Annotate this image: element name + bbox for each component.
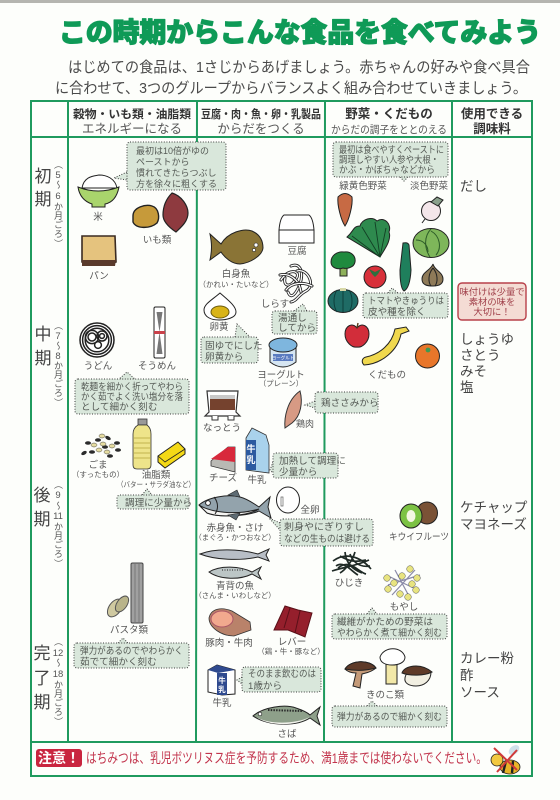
callout: cheese and milk: 少量から — [279, 466, 317, 478]
icon: kiwi — [389, 502, 449, 543]
icon: hijiki: ひじき — [335, 578, 363, 589]
period: middle: （ — [53, 321, 63, 331]
seasonings: completion period: カレー粉 — [460, 651, 514, 666]
icon: tofu — [279, 215, 314, 257]
table grid — [31, 101, 532, 742]
icon: bread — [82, 236, 116, 282]
icon: pasta — [104, 563, 148, 636]
period: completion — [34, 637, 63, 726]
header: seasonings: 使用できる — [461, 106, 523, 121]
label: fats and oils — [117, 469, 195, 489]
icon: tuna: （まぐろ・かつおなど） — [194, 533, 276, 542]
callout: drinking milk — [237, 667, 321, 692]
callout: pasta: 弾力があるのでやわらかく — [80, 645, 183, 657]
period: middle: ～ — [53, 341, 63, 350]
seasoning: dashi: だし — [460, 179, 487, 194]
callout: first vegetables — [333, 142, 448, 181]
callout: first vegetables: 調理しやすい人参や大根・ — [339, 154, 439, 166]
icon: sesame: （すったもの） — [72, 470, 124, 479]
header: vegetables: からだの調子をととのえる — [331, 124, 447, 136]
icon: pasta: パスタ類 — [110, 624, 148, 636]
header: protein: 豆腐・肉・魚・卵・乳製品 — [201, 107, 321, 121]
icon: cabbage — [413, 228, 449, 258]
callout: fibrous vegetables — [332, 608, 447, 639]
icon: somen: そうめん — [138, 361, 176, 372]
icon: milk carton: 乳 — [246, 454, 256, 465]
period: late: ） — [53, 559, 63, 568]
callout: udon and somen: として細かく刻む — [81, 401, 157, 413]
callout: drinking milk: 1歳から — [248, 680, 282, 692]
icon: pork and beef: 豚肉・牛肉 — [205, 637, 253, 649]
label: fruits: くだもの — [368, 370, 406, 381]
callout: fibrous vegetables: やわらかく煮て細かく刻む — [337, 627, 442, 639]
callout: raw fish warning: 刺身やにぎりすし — [284, 521, 364, 533]
icon: rice bowl — [78, 175, 119, 223]
icon: chicken breast — [285, 391, 314, 429]
icon: bee crossed out — [491, 743, 521, 774]
icon: carrot — [338, 194, 352, 226]
icon: onion — [422, 264, 443, 286]
period: middle: 中 — [34, 325, 52, 344]
callout: rice porridge — [114, 142, 226, 190]
callout: rice porridge: 慣れてきたらつぶし — [136, 167, 216, 178]
icon: liver — [257, 606, 325, 656]
icon: milk carton: 牛 — [246, 443, 256, 454]
icon: tofu: 豆腐 — [287, 245, 307, 257]
period: middle: 期 — [34, 349, 52, 368]
icon: mackerel: さば — [277, 729, 297, 740]
icon: natto — [203, 391, 241, 434]
seasonings: middle period: さとう — [460, 348, 500, 363]
title: この時期からこんな食品を食べてみよう — [59, 18, 541, 48]
icon: mandarin orange — [416, 344, 440, 368]
icon: oil bottle — [133, 419, 151, 469]
callout: tomato and cucumber — [363, 288, 448, 318]
seasonings: middle period: みそ — [460, 364, 487, 379]
callout: egg yolk — [201, 324, 263, 363]
callout: light seasoning: 大切に！ — [473, 306, 511, 317]
icon: bean sprouts — [384, 566, 420, 613]
period: early — [34, 160, 63, 248]
seasonings: late period: ケチャップ — [460, 500, 528, 515]
icon: tuna — [194, 490, 276, 542]
seasonings: middle period: 塩 — [460, 380, 474, 395]
label: fats and oils: （バター・サラダ油など） — [117, 479, 195, 489]
period: early: 5 — [55, 170, 61, 181]
period: early: ～ — [53, 180, 63, 189]
icon: whole egg: 全卵 — [300, 504, 320, 516]
callout: egg yolk: 卵黄から — [205, 351, 243, 363]
icon: mushrooms — [345, 649, 432, 701]
header: grains — [73, 107, 192, 136]
callout: shirasu: してから — [278, 323, 316, 334]
intro text: はじめての食品は、1さじからあげましょう。赤ちゃんの好みや食べ具合 — [68, 59, 530, 76]
icon: yogurt: ヨーグルト — [272, 354, 294, 362]
period: early: 期 — [34, 190, 52, 209]
period: completion: （ — [53, 637, 63, 647]
header: grains: 穀物・いも類・油脂類 — [73, 107, 192, 121]
icon: potato and sweet potato: いも類 — [143, 234, 172, 246]
icon: flounder: 白身魚 — [222, 268, 251, 280]
seasonings: completion period: ソース — [460, 685, 500, 700]
intro text: に合わせて、3つのグループからバランスよく組み合わせていきましょう。 — [55, 80, 527, 97]
period: late: か月ごろ — [53, 522, 63, 558]
icon: milk pack small — [208, 665, 235, 709]
icon: mushrooms: きのこ類 — [366, 689, 404, 701]
callout: pasta: 茹でて細かく刻む — [80, 656, 157, 668]
icon: butter — [158, 442, 185, 468]
seasonings: middle period: しょうゆ — [460, 332, 514, 347]
label: light vegetables: 淡色野菜 — [410, 180, 448, 192]
callout: light seasoning: 味付けは少量で — [459, 286, 525, 297]
icon: tuna: 赤身魚・さけ — [206, 522, 264, 534]
icon: udon: うどん — [84, 361, 112, 372]
seasonings: late period — [460, 500, 528, 532]
callout: shirasu — [272, 304, 317, 334]
seasonings: completion period — [460, 651, 514, 700]
icon: pumpkin — [328, 288, 358, 312]
icon: milk pack small: 牛 — [218, 675, 226, 685]
icon: cucumber — [400, 243, 411, 291]
icon: somen — [138, 307, 176, 372]
period: early: か月ごろ — [53, 202, 63, 238]
period: late: 9 — [55, 490, 61, 501]
period: late: 期 — [34, 510, 50, 529]
icon: pork and beef — [205, 609, 253, 649]
period: late: ～ — [53, 501, 63, 510]
icon: yogurt: ヨーグルト — [257, 369, 305, 381]
callout: oils — [117, 489, 192, 509]
icon: natto: なっとう — [203, 423, 241, 434]
icon: liver: （鶏・牛・豚など） — [257, 646, 325, 656]
callout: drinking milk: そのまま飲むのは — [248, 668, 316, 680]
label: green vegetables: 緑黄色野菜 — [339, 180, 387, 192]
callout: rice porridge: ペーストから — [136, 157, 190, 167]
icon: broccoli — [331, 252, 355, 276]
callout: first vegetables: 最初は食べやすくペーストに — [339, 144, 444, 156]
icon: saury and sardine: （さんま・いわしなど） — [194, 591, 276, 600]
caution box: 注意！ — [38, 750, 80, 766]
header: grains: エネルギーになる — [82, 122, 182, 136]
period: completion: か月ごろ — [53, 680, 63, 716]
period: late: （ — [53, 480, 63, 490]
icon: yogurt: （プレーン） — [259, 379, 303, 388]
period: completion: 期 — [34, 693, 50, 712]
icon: egg yolk — [204, 293, 236, 333]
icon: turnip — [422, 197, 443, 223]
callout: raw fish warning: などの生ものは避ける — [284, 533, 370, 545]
icon: banana — [362, 327, 409, 365]
icon: flounder: （かれい・たいなど） — [198, 280, 274, 289]
icon: apple — [345, 323, 369, 347]
callout: light seasoning: 素材の味を — [469, 296, 515, 307]
period: completion: ） — [53, 717, 63, 726]
period: late: 後 — [34, 486, 50, 505]
callout: first vegetables: かぶ・かぼちゃなどから — [339, 165, 435, 176]
callout: rice porridge: 方を徐々に粗くする — [136, 178, 217, 189]
icon: milk carton: 牛乳 — [247, 474, 267, 486]
callout: raw fish warning — [269, 518, 373, 546]
callout: cheese and milk: 加熱して調理に — [279, 455, 346, 467]
icon: sesame — [72, 434, 124, 479]
caution box — [31, 742, 532, 776]
period: completion: 了 — [34, 669, 50, 688]
icon: milk carton — [246, 428, 269, 486]
icon: flounder — [198, 230, 274, 289]
icon: sesame: ごま — [88, 459, 108, 471]
period: middle: ） — [53, 398, 63, 407]
icon: bread: パン — [89, 271, 109, 282]
icon: rice bowl: 米 — [93, 211, 103, 223]
period: late — [34, 480, 63, 568]
icon: udon — [80, 323, 114, 372]
callout: rice porridge: 最初は10倍がゆの — [136, 145, 209, 156]
icon: cheese — [209, 447, 238, 484]
icon: chicken breast: 鶏肉 — [296, 418, 314, 429]
period: completion: 12 — [53, 648, 63, 659]
seasonings: late period: マヨネーズ — [460, 517, 527, 532]
period: late: 11 — [53, 511, 63, 522]
header: vegetables — [331, 106, 447, 136]
callout: light seasoning — [458, 283, 526, 320]
callout: cheese and milk — [270, 453, 346, 478]
callout: oils: 調理に少量から — [125, 497, 192, 509]
period: completion: 18 — [53, 669, 63, 680]
icon: tomato — [364, 266, 386, 288]
period: middle: 8 — [55, 351, 61, 362]
callout: chicken — [305, 392, 379, 413]
callout: tomato and cucumber: トマトやきゅうりは — [368, 296, 444, 307]
callout: udon and somen: 乾麺を細かく折ってやわら — [81, 381, 183, 393]
callout: udon and somen — [75, 372, 189, 414]
period: early: 6 — [55, 191, 61, 202]
icon: milk pack small: 乳 — [218, 684, 226, 694]
icon: potato and sweet potato — [133, 193, 188, 246]
icon: kiwi: キウイフルーツ — [389, 532, 449, 543]
period: early: 初 — [34, 167, 52, 186]
period: middle: か月ごろ — [53, 361, 63, 397]
icon: saury and sardine: 青背の魚 — [216, 580, 254, 592]
period: completion: ～ — [53, 658, 63, 667]
icon: egg yolk: 卵黄 — [209, 321, 229, 333]
period: middle: 7 — [55, 331, 61, 342]
label: fats and oils: 油脂類 — [142, 469, 171, 481]
icon: whole egg — [276, 487, 320, 516]
header: vegetables: 野菜・くだもの — [345, 106, 433, 121]
callout: mushrooms — [332, 701, 447, 727]
icon: saury and sardine — [194, 549, 276, 600]
callout: mushrooms: 弾力があるので細かく刻む — [337, 711, 442, 723]
icon: liver: レバー — [278, 637, 306, 648]
icon: milk pack small: 牛乳 — [212, 697, 232, 709]
icon: shirasu: しらす — [261, 299, 289, 310]
callout: fibrous vegetables: 繊維がかための野菜は — [337, 616, 433, 628]
period: completion: 完 — [34, 644, 50, 663]
seasonings: middle period — [460, 332, 514, 395]
header: protein — [201, 107, 321, 136]
intro text — [55, 59, 530, 97]
callout: udon and somen: かく茹でよく洗い塩分を落 — [81, 391, 183, 403]
callout: shirasu: 湯通し — [278, 312, 307, 324]
icon: mackerel — [253, 706, 320, 740]
icon: cheese: チーズ — [209, 472, 238, 484]
icon: yogurt — [257, 338, 305, 388]
period: middle — [34, 321, 63, 407]
callout: egg yolk: 固ゆでにした — [205, 341, 263, 352]
callout: tomato and cucumber: 皮や種を除く — [368, 306, 426, 318]
icon: shirasu — [261, 265, 312, 310]
header: seasonings: 調味料 — [473, 121, 511, 136]
period: early: ） — [53, 239, 63, 248]
period: early: （ — [53, 160, 63, 170]
header: protein: からだをつくる — [217, 122, 305, 136]
callout: pasta — [74, 638, 189, 668]
icon: bean sprouts: もやし — [390, 602, 418, 613]
icon: hijiki — [332, 552, 371, 589]
icon: spinach — [347, 219, 390, 257]
header: seasonings — [461, 106, 523, 136]
callout: chicken: 鶏ささみから — [321, 397, 379, 409]
seasonings: completion period: 酢 — [460, 668, 474, 683]
